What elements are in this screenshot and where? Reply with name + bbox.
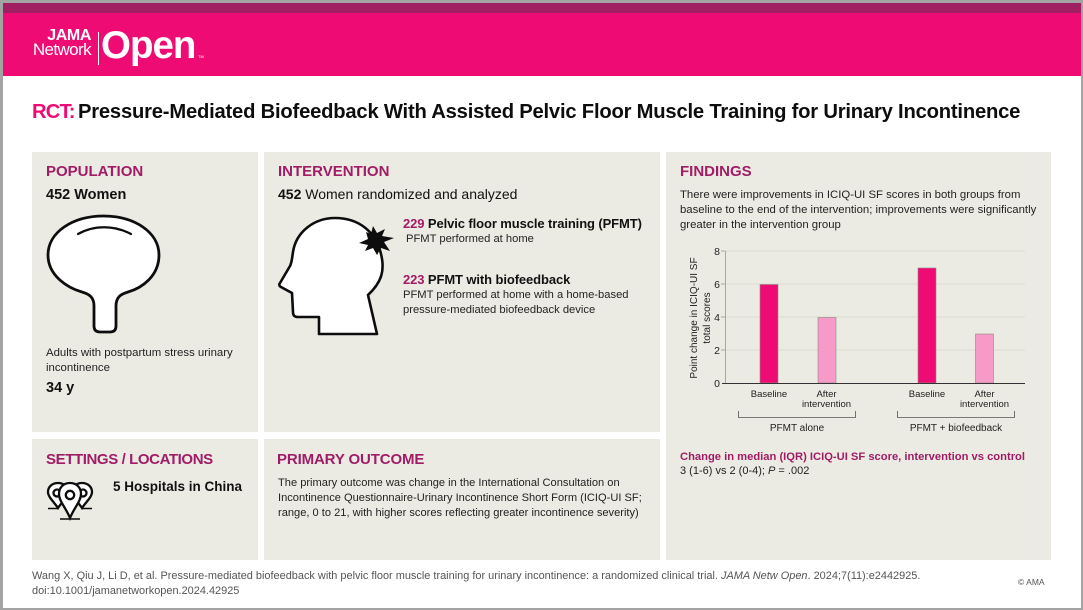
group description: biofeedback: PFMT performed at home with a home-based: [403, 289, 629, 301]
group description: PFMT: PFMT performed at home: [406, 233, 534, 245]
panel: primary outcome: [264, 439, 660, 560]
x axis labels: Baseline: [909, 389, 945, 400]
heading: intervention: INTERVENTION: [278, 163, 389, 180]
icon: map pins: [46, 482, 94, 521]
y axis title: total scores: [702, 292, 713, 344]
primary outcome description: [278, 477, 642, 519]
panel: intervention: [264, 152, 660, 432]
heading: settings: SETTINGS / LOCATIONS: [46, 451, 213, 468]
y axis title: Point change in ICIQ-UI SF: [689, 257, 700, 379]
icon: head with pain burst: [278, 216, 394, 336]
findings summary: [680, 189, 1036, 231]
population description: incontinence: [46, 362, 110, 374]
bar chart: 6: [714, 279, 720, 291]
header band: [3, 3, 1081, 76]
result values: 3 (1-6) vs 2 (0-4); P = .002: [680, 465, 809, 477]
icon: bladder: [46, 214, 160, 334]
population description: Adults with postpartum stress urinary: [46, 347, 233, 359]
bar chart: 2: [714, 345, 720, 357]
heading: findings: FINDINGS: [680, 163, 752, 180]
group description: biofeedback: pressure-mediated biofeedback device: [403, 304, 595, 316]
y axis title: [689, 257, 713, 379]
settings text: 5 Hospitals in China: [113, 479, 242, 494]
result heading: Change in median (IQR) ICIQ-UI SF score, intervention vs control: [680, 451, 1025, 463]
icon: pain burst: [359, 226, 394, 255]
JAMA Network Open logo: TM: [198, 54, 204, 59]
group labels: PFMT + biofeedback: [910, 423, 1003, 434]
population description: [46, 347, 233, 374]
x axis labels: After: [816, 389, 837, 400]
group labels: PFMT alone: [770, 423, 825, 434]
citation: doi:10.1001/jamanetworkopen.2024.42925: [32, 584, 239, 596]
findings summary: baseline to the end of the intervention; improvements were significantly: [680, 204, 1036, 216]
bar chart: 4: [714, 312, 720, 324]
title: RCT: Pressure-Mediated Biofeedback With Assisted Pelvic Floor Muscle Training for Urinary Incontinence: [32, 101, 1020, 123]
group description: biofeedback: [403, 289, 629, 316]
heading: population: POPULATION: [46, 163, 143, 180]
findings summary: There were improvements in ICIQ-UI SF scores in both groups from: [680, 189, 1020, 201]
primary outcome description: Incontinence Questionnaire-Urinary Incontinence Short Form (ICIQ-UI SF;: [278, 492, 642, 504]
bar chart: 8: [714, 246, 720, 258]
bars: [760, 268, 994, 383]
group: PFMT: [403, 216, 642, 245]
copyright: © AMA: [1018, 577, 1045, 587]
group label: biofeedback: 223 PFMT with biofeedback: [403, 272, 570, 287]
x axis labels: After: [974, 389, 995, 400]
x axis labels: [751, 389, 1009, 410]
x axis labels: Baseline: [751, 389, 787, 400]
y axis: [721, 251, 726, 384]
x axis labels: intervention: [802, 399, 851, 410]
primary outcome description: The primary outcome was change in the International Consultation on: [278, 477, 620, 489]
panel: population: [32, 152, 258, 432]
randomized count: 452 Women randomized and analyzed: [278, 186, 517, 202]
mean age: 34 y: [46, 380, 74, 396]
participant count: 452 Women: [46, 187, 126, 203]
x axis labels: intervention: [960, 399, 1009, 410]
top purple strip: [3, 3, 1081, 13]
JAMA Network Open logo: Open: [101, 24, 195, 67]
primary outcome description: range, 0 to 21, with higher scores reflecting greater incontinence severity): [278, 507, 639, 519]
group labels: [770, 423, 1003, 434]
JAMA Network Open logo: [33, 24, 204, 67]
findings summary: greater in the intervention group: [680, 219, 841, 231]
JAMA Network Open logo: JAMA: [47, 27, 91, 44]
bar chart: 0: [714, 378, 720, 390]
panel: findings: [666, 152, 1051, 560]
group brackets: [738, 411, 1014, 418]
citation: [32, 570, 920, 596]
x axis line: [722, 382, 1025, 384]
group label: PFMT: 229 Pelvic floor muscle training (PFMT): [403, 216, 642, 231]
bar chart: [689, 246, 1025, 434]
heading: primary outcome: PRIMARY OUTCOME: [277, 451, 424, 468]
panel: settings and locations: [32, 439, 258, 560]
citation: Wang X, Qiu J, Li D, et al. Pressure-mediated biofeedback with pelvic floor muscle training for urinary incontinence: a randomized clinical trial. JAMA Netw Open. 2024;7(11):e2442925.: [32, 570, 920, 582]
JAMA Network Open logo: Network: [33, 40, 91, 59]
group: PFMT with biofeedback: [403, 272, 629, 316]
